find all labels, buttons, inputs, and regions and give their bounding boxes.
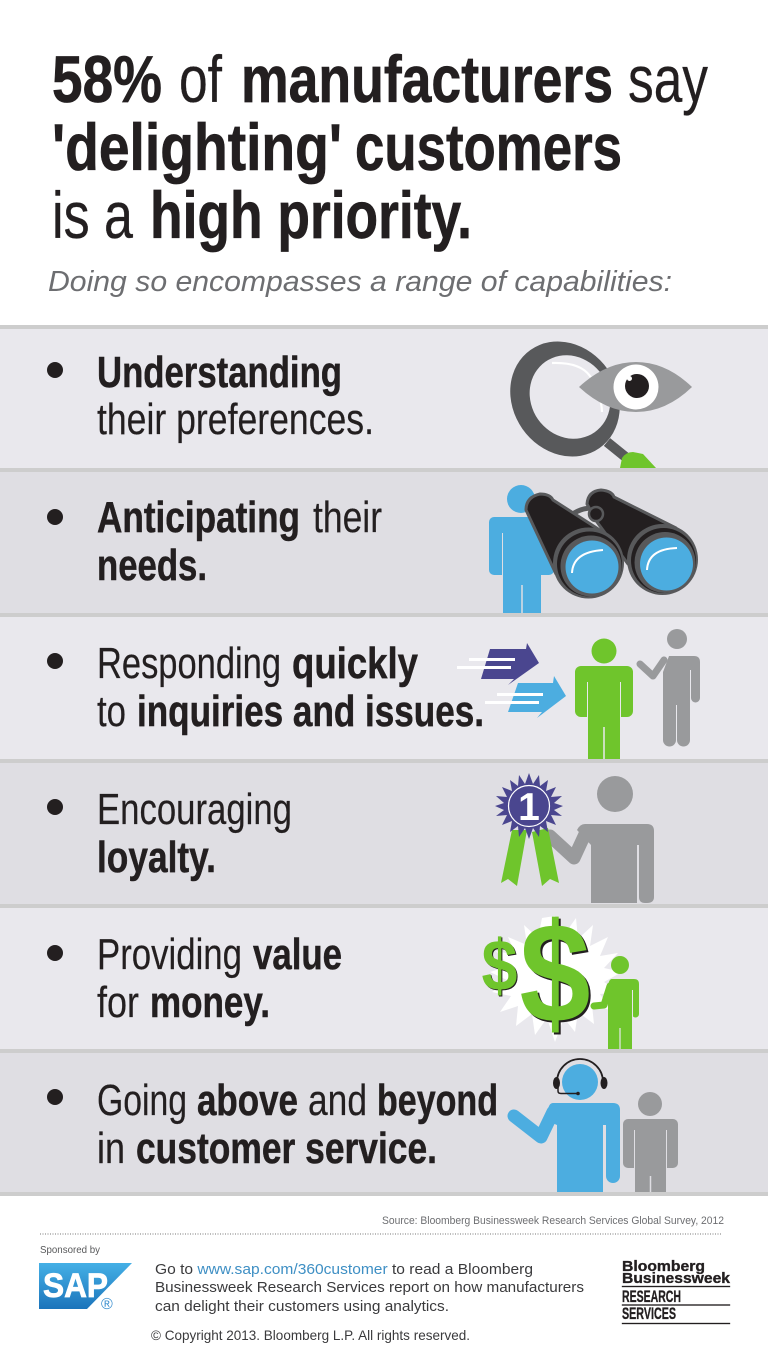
panel: anticipating: Anticipating [97,493,300,542]
title: say [628,42,708,116]
panel: value for money: money. [150,978,270,1027]
copyright: © Copyright 2013. Bloomberg L.P. All rights reserved. [151,1327,470,1343]
icon: blue agent with headset [514,1059,620,1192]
title: customers [355,110,622,184]
panel: responding [47,629,700,759]
panel: customer service: above [197,1076,298,1125]
logo: Bloomberg Businessweek Research Services: RESEARCH [622,1287,681,1306]
source note: Source: Bloomberg Businessweek Research Services Global Survey, 2012 [382,1215,724,1227]
icon: dollar signs: $ [482,927,518,1007]
panel: understanding: their preferences. [97,395,374,444]
sponsored by label: Sponsored by [40,1245,100,1256]
icon: green person [575,638,633,759]
icon: magnifying glass and eye [488,320,692,478]
icon: speed arrows [457,643,566,718]
panel: customer service: beyond [377,1076,498,1125]
panel: encouraging loyalty: Encouraging [97,785,292,834]
icon: first place ribbon: 1 [518,786,540,829]
call to action text: Go to www.sap.com/360customer to read a Bloomberg [155,1261,533,1278]
logo: SAP: SAP [43,1267,108,1305]
icon: dollar signs [482,894,622,1055]
logo: Bloomberg Businessweek Research Services [622,1258,731,1324]
call to action text [155,1261,584,1315]
logo: Bloomberg Businessweek Research Services: SERVICES [622,1304,676,1323]
panel: customer service: Going [97,1076,187,1125]
panel: value for money [47,894,639,1055]
title: manufacturers [241,42,613,116]
panel: customer service: and [308,1076,367,1125]
title: 'delighting' [52,110,342,184]
icon: grey person presenting [550,776,654,903]
panel: customer service: customer service. [136,1124,437,1173]
title: high priority. [150,178,472,252]
panel: customer service [47,1059,678,1192]
panel: encouraging loyalty [47,773,654,903]
logo: Bloomberg Businessweek Research Services: Businessweek [622,1270,731,1287]
title: of [179,42,223,116]
icon: dollar signs: $ [520,894,590,1053]
panel: anticipating [47,485,698,613]
panel: value for money: Providing [97,930,242,979]
panel: encouraging loyalty: loyalty. [97,833,216,882]
panel: value for money: value [253,930,342,979]
panel: responding: inquiries and issues. [137,687,484,736]
icon: person with binoculars [489,485,698,613]
logo: SAP: ® [101,1296,113,1313]
panel: anticipating: needs. [97,541,207,590]
title [52,42,708,252]
title: 58% [52,42,162,116]
icon: grey customer [623,1092,678,1192]
icon: dollar signs: $ [482,926,518,1006]
subtitle: Doing so encompasses a range of capabilities: [48,266,672,298]
call to action text: can delight their customers using analytics. [155,1298,449,1315]
logo: SAP [39,1263,132,1313]
panel: anticipating: their [313,493,382,542]
title: is a [52,178,133,252]
panel: understanding [47,320,692,478]
panel: customer service: in [97,1124,125,1173]
icon: small green person [594,956,639,1049]
panel: band backgrounds [0,325,768,1196]
panel: understanding: Understanding [97,348,342,397]
icon: grey person [640,629,700,747]
icon: first place ribbon [495,773,563,886]
panel: responding: quickly [292,639,418,688]
panel: responding: Responding [97,639,281,688]
panel: responding: to [97,687,126,736]
icon: dollar signs: $ [522,896,592,1055]
call to action text: Businessweek Research Services report on how manufacturers [155,1279,584,1296]
logo: Bloomberg Businessweek Research Services: Bloomberg [622,1258,705,1275]
panel: value for money: for [97,978,139,1027]
